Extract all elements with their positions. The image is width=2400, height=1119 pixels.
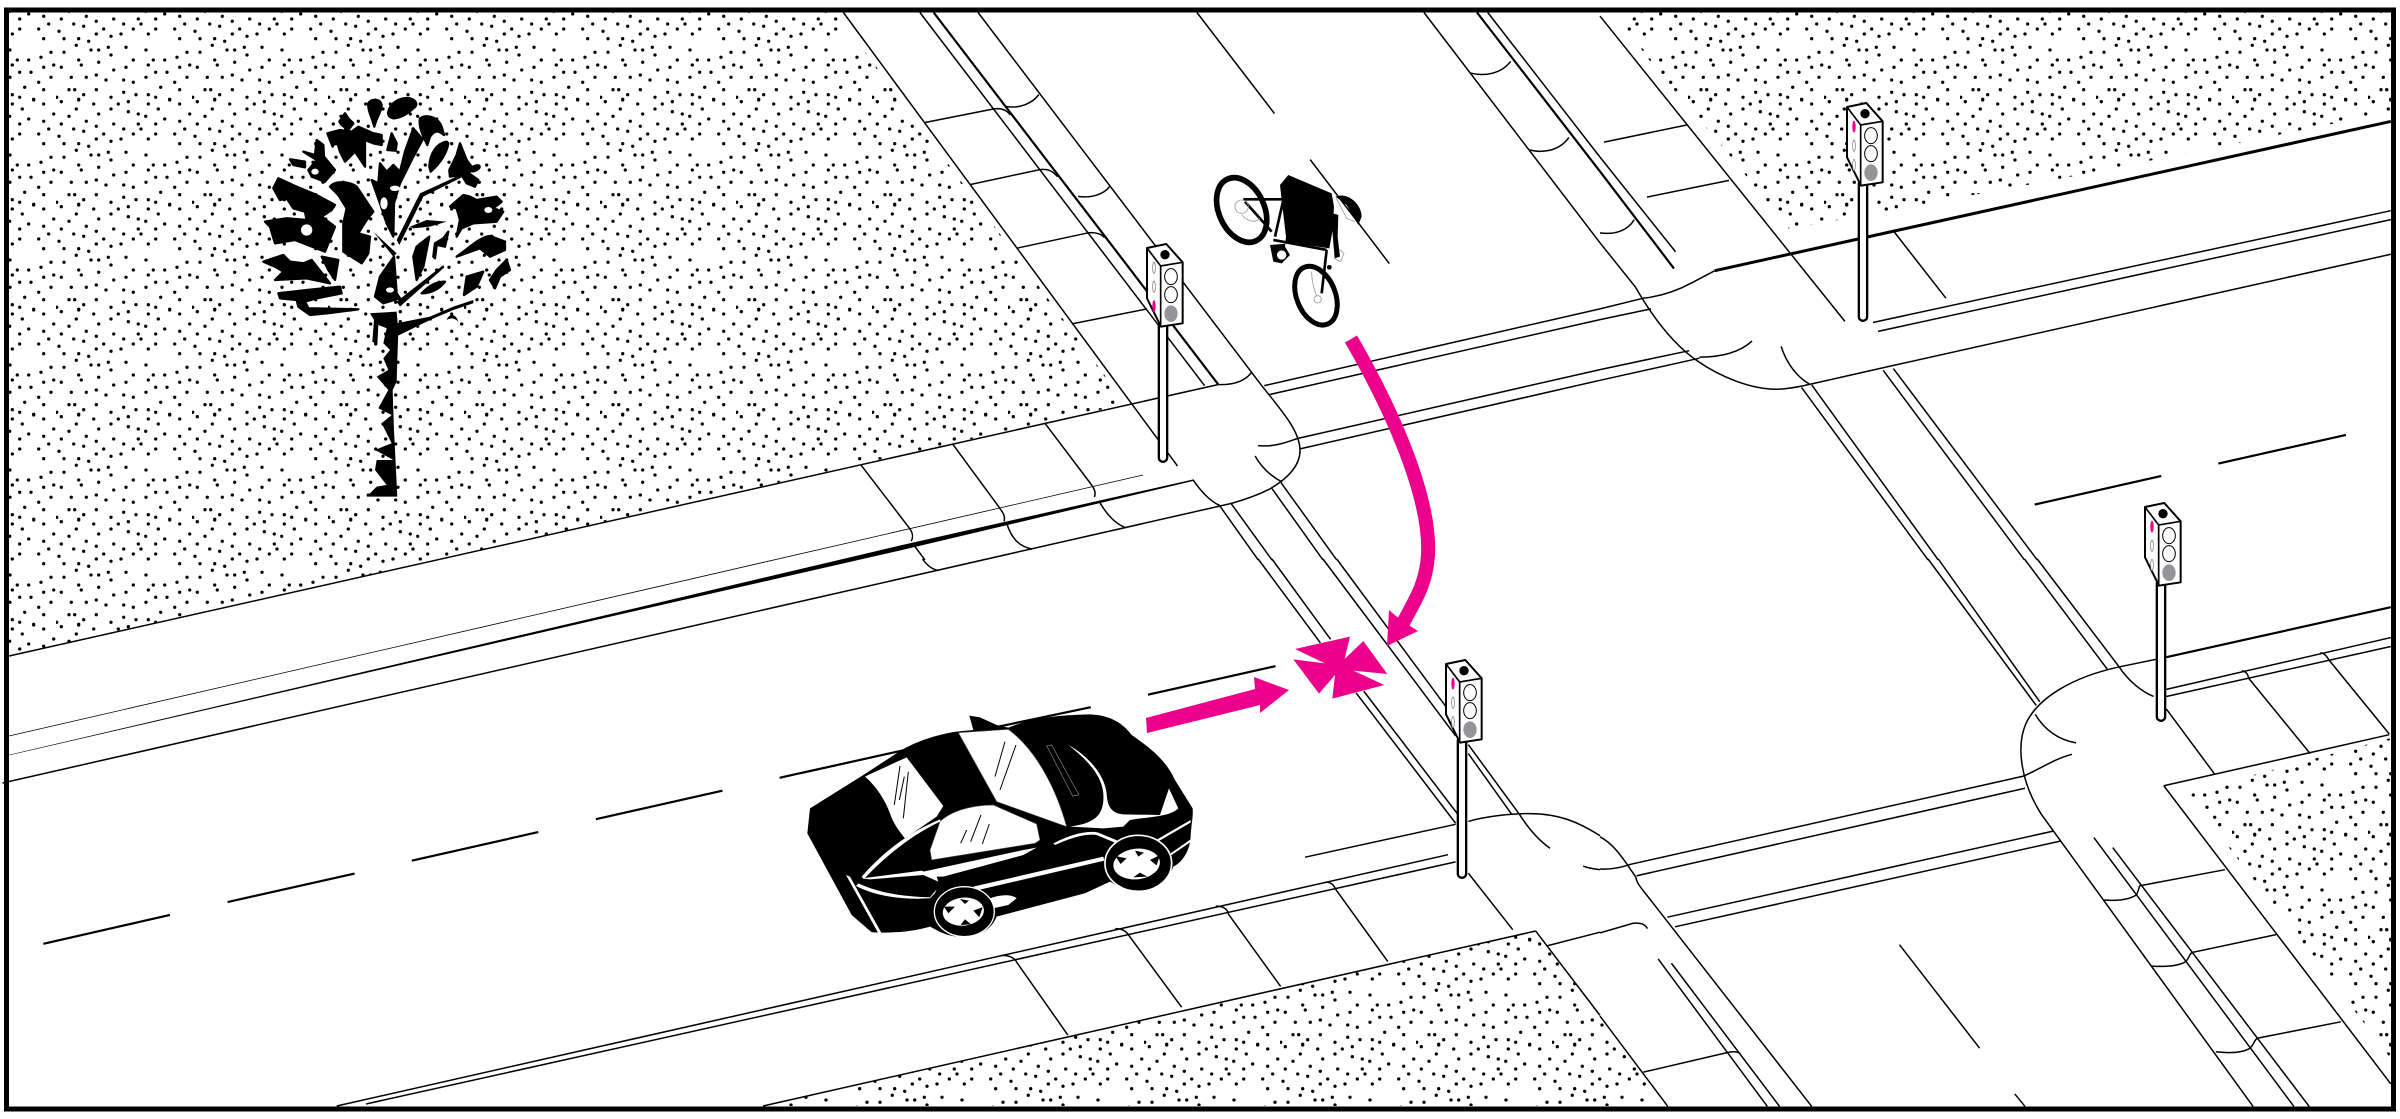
arrow: bicycle path xyxy=(1351,339,1428,646)
arrow: car path xyxy=(1146,677,1289,733)
traffic light: upper left xyxy=(1147,244,1183,458)
roads: lower right section xyxy=(1600,559,2391,1106)
roads: long continuous lines xyxy=(2,385,1536,1106)
pedal and feet outlines xyxy=(1235,197,1355,303)
tree trunk xyxy=(367,312,398,497)
heavy tapered kerb line xyxy=(4,480,1193,756)
rear wheel xyxy=(934,887,994,937)
stippled ground: bottom-right block xyxy=(2187,738,2391,1059)
front wheel xyxy=(1105,835,1172,891)
bicycle frame xyxy=(1243,199,1327,293)
roof vent outline xyxy=(1047,745,1079,796)
windshield xyxy=(958,729,1067,827)
rear wheel xyxy=(1207,170,1277,250)
bicycle and rider xyxy=(1207,170,1362,331)
stippled ground: top-right block xyxy=(1615,12,2391,229)
tree xyxy=(263,98,510,497)
rider arm xyxy=(1332,213,1340,258)
tree branches xyxy=(397,175,462,245)
roads: left section dashes xyxy=(43,773,800,944)
collision burst xyxy=(1293,637,1387,699)
traffic light: upper right xyxy=(1847,103,1883,317)
tree foliage xyxy=(263,98,510,315)
stippled ground: top-left block xyxy=(9,12,1126,656)
window glare lines xyxy=(894,742,1016,844)
roads: lower centre section xyxy=(800,559,1600,1035)
helmet xyxy=(1336,195,1362,225)
car xyxy=(807,714,1193,937)
side window xyxy=(930,805,1040,860)
roads: upper centre section xyxy=(843,12,1600,560)
stippled ground: bottom block xyxy=(762,931,1668,1106)
rider torso xyxy=(1270,175,1334,263)
traffic light: right xyxy=(2145,503,2181,717)
front wheel xyxy=(1287,260,1345,331)
white body highlights xyxy=(846,745,1191,933)
traffic light: lower centre xyxy=(1446,660,1482,874)
car body silhouette xyxy=(807,714,1193,937)
roads: upper right section xyxy=(1600,16,2391,560)
rear window xyxy=(865,757,943,838)
